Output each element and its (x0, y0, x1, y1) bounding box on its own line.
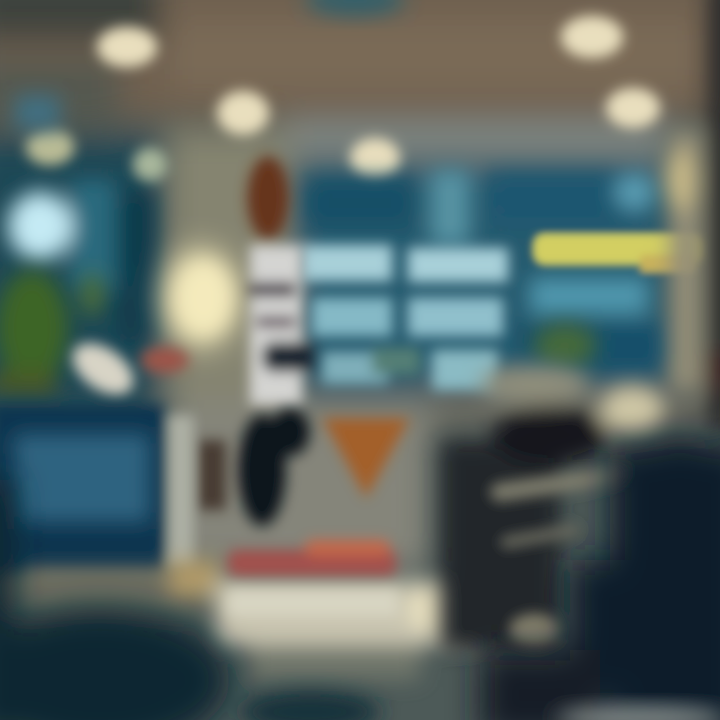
right column (665, 0, 720, 430)
dark foreground chair right (480, 436, 720, 720)
pale strip bottom right (555, 706, 720, 720)
table base (20, 560, 485, 680)
bright data grid on screen (302, 245, 508, 390)
chair stripes (489, 464, 635, 646)
plant on back right (533, 323, 597, 367)
orange cone shape (322, 418, 410, 498)
dark foreground center (240, 690, 380, 720)
monitor on left (0, 404, 194, 572)
ceiling lights (26, 16, 660, 182)
person (198, 156, 314, 526)
white object and red accent beside plant (64, 333, 189, 405)
warm glow behind person (164, 250, 236, 346)
red stack on table (228, 540, 398, 616)
seated figure right (440, 365, 664, 650)
left windows (8, 95, 155, 340)
person legs (198, 408, 310, 526)
person striped torso (250, 245, 314, 405)
person head (247, 156, 289, 240)
yellow banner (533, 233, 703, 273)
screens on back wall (305, 170, 665, 370)
ornament: dome at top of ceiling (305, 0, 405, 16)
plant on left (0, 270, 103, 394)
dark foreground chair left (0, 480, 230, 720)
